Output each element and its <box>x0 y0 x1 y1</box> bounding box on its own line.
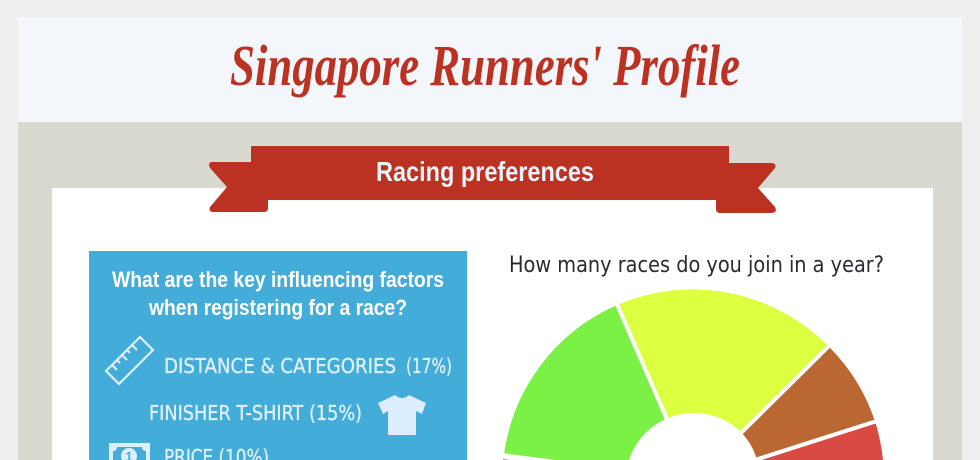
panel: influencing factors <box>89 251 467 460</box>
panel: racing preferences <box>52 146 933 460</box>
slice: red <box>755 421 886 460</box>
factors question heading: What are the key influencing factors <box>112 267 444 292</box>
title: Singapore Runners' Profile <box>230 33 740 98</box>
slice: brown <box>740 345 877 460</box>
factors question heading <box>112 267 444 320</box>
factors question heading: when registering for a race? <box>148 295 407 320</box>
slice: green <box>502 303 668 460</box>
header panel <box>18 17 962 122</box>
slice: grey <box>503 459 530 460</box>
section ribbon <box>209 146 776 213</box>
factor: finisher t-shirt: FINISHER T-SHIRT (15%) <box>149 401 362 425</box>
icon: t-shirt <box>378 395 426 435</box>
icon: banknote <box>109 443 150 460</box>
slice: yellow <box>616 287 830 434</box>
chart heading: How many races do you join in a year? <box>509 253 884 278</box>
factor: distance and categories: DISTANCE & CATEGORIES <box>164 354 396 378</box>
ribbon heading: Racing preferences <box>376 156 594 187</box>
donut chart <box>502 287 886 460</box>
icon: ruler <box>106 337 153 384</box>
factor: distance and categories: (17%) <box>406 354 452 378</box>
